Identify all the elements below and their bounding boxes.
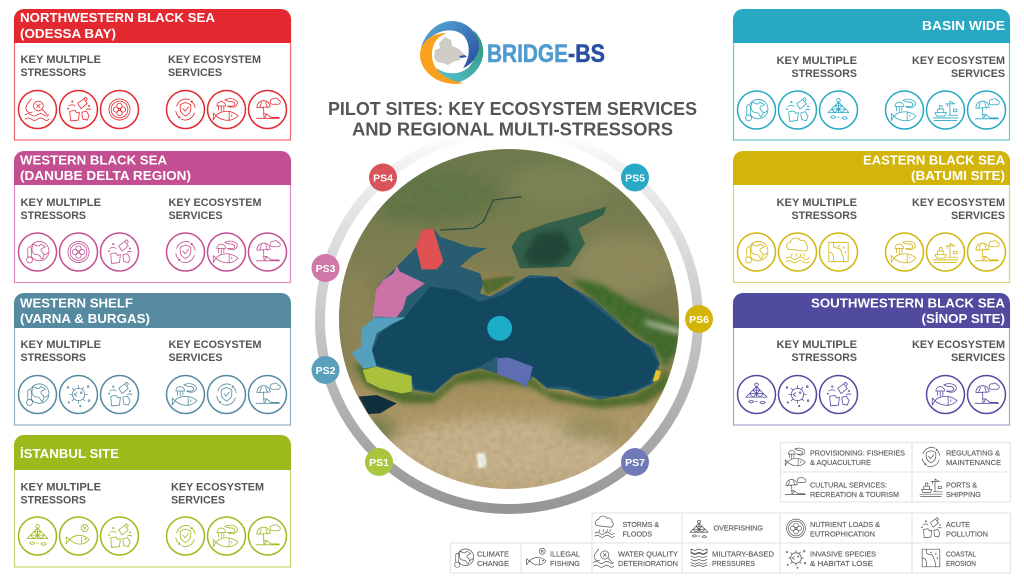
legend item: nutrient loads: EUTROPHICATION <box>810 530 875 538</box>
icon: provisioning <box>886 91 924 129</box>
icon: cultural <box>968 233 1006 271</box>
icon: climate change <box>18 233 56 271</box>
icon: acute pollution <box>820 376 858 414</box>
stressors label: STRESSORS <box>792 68 857 80</box>
icon: provisioning <box>208 517 246 555</box>
title <box>328 98 697 140</box>
services label: SERVICES <box>171 494 225 506</box>
icon: provisioning <box>886 233 924 271</box>
stressors label: KEY MULTIPLE <box>776 339 857 351</box>
legend item: cultural: RECREATION & TOURISM <box>810 490 899 499</box>
stressors label: STRESSORS <box>792 210 857 222</box>
legend item: climate change: CLIMATE <box>477 550 509 558</box>
legend item: water quality <box>594 549 678 568</box>
stressors label: STRESSORS <box>20 67 86 79</box>
icon: acute pollution <box>100 517 138 555</box>
icon: overfishing <box>820 91 858 129</box>
heading: EASTERN BLACK SEA <box>863 152 1006 168</box>
icon: cultural <box>248 376 286 414</box>
title: PILOT SITES: KEY ECOSYSTEM SERVICES <box>328 98 697 119</box>
icon: provisioning <box>208 233 246 271</box>
legend item: regulating: MAINTENANCE <box>946 458 1001 467</box>
services label: KEY ECOSYSTEM <box>171 482 264 494</box>
panel: Northwestern Black Sea <box>14 9 291 140</box>
services label: SERVICES <box>168 67 222 79</box>
panel: Istanbul site <box>14 435 291 567</box>
legend item: ports: PORTS & <box>946 480 977 490</box>
stressors label: STRESSORS <box>20 494 86 506</box>
services label: SERVICES <box>168 210 222 222</box>
icon: illegal fishing <box>60 517 98 555</box>
panel: Southwestern Black Sea <box>733 293 1010 425</box>
ring around map <box>320 131 698 509</box>
heading <box>733 9 1010 43</box>
panel: Basin wide <box>733 9 1010 140</box>
badge PS3: PS3 <box>316 263 336 275</box>
services label: KEY ECOSYSTEM <box>168 54 261 66</box>
heading: WESTERN BLACK SEA <box>20 152 168 168</box>
legend item: water quality: DETERIORATION <box>618 559 678 568</box>
legend item: provisioning: PROVISIONING: FISHERIES <box>810 448 905 458</box>
stressors label: KEY MULTIPLE <box>20 197 101 209</box>
badge PS6 <box>685 305 713 333</box>
icon: provisioning <box>208 90 246 128</box>
legend item: illegal fishing: ILLEGAL <box>550 550 580 558</box>
legend item: regulating: REGULATING & <box>946 448 1000 458</box>
badge PS2 <box>312 356 340 384</box>
icon: cultural <box>968 91 1006 129</box>
legend item: cultural <box>785 477 899 499</box>
stressors label <box>776 339 857 364</box>
icon: climate change <box>738 233 776 271</box>
site PS7 area <box>497 357 533 388</box>
icon: water quality <box>18 90 56 128</box>
services label <box>912 55 1005 80</box>
legend item: military pressures: PRESSURES <box>712 559 755 568</box>
site PS2 area <box>352 317 406 368</box>
icon: storms and floods <box>778 233 816 271</box>
stressors label: KEY MULTIPLE <box>776 197 857 209</box>
stressors label <box>20 54 101 79</box>
legend item: overfishing: OVERFISHING <box>714 524 763 532</box>
badge PS4: PS4 <box>373 172 393 184</box>
stressors label: KEY MULTIPLE <box>20 339 101 351</box>
icon: overfishing <box>738 376 776 414</box>
icon: acute pollution <box>100 233 138 271</box>
icon: provisioning <box>926 376 964 414</box>
icon: regulating <box>166 90 204 128</box>
panel: Western Black Sea <box>14 151 291 282</box>
legend item: cultural: CULTURAL SERVICES: <box>810 480 887 490</box>
heading <box>14 9 291 43</box>
icon: cultural <box>248 517 286 555</box>
heading: NORTHWESTERN BLACK SEA <box>20 10 216 25</box>
badge PS1: PS1 <box>369 457 389 469</box>
title: AND REGIONAL MULTI-STRESSORS <box>352 118 673 140</box>
services label <box>168 54 261 79</box>
icon: coastal erosion <box>820 233 858 271</box>
heading: İSTANBUL SITE <box>20 446 119 461</box>
site PS5 marker <box>487 316 512 341</box>
stressors label <box>20 339 101 364</box>
stressors label: STRESSORS <box>20 352 86 364</box>
stressors label <box>20 197 101 222</box>
services label: SERVICES <box>951 68 1005 80</box>
stressors label: STRESSORS <box>20 210 86 222</box>
icon: ports <box>926 233 964 271</box>
legend item: storms and floods <box>595 516 659 538</box>
services label: SERVICES <box>951 352 1005 364</box>
heading <box>733 293 1010 328</box>
services label: KEY ECOSYSTEM <box>912 55 1005 67</box>
legend item: invasive species: INVASIVE SPECIES <box>810 550 876 558</box>
logo: BRIDGE-BS: BRIDGE <box>487 40 568 68</box>
services label <box>168 339 262 364</box>
stressors label <box>20 482 101 506</box>
stressors label: KEY MULTIPLE <box>20 482 101 494</box>
icon: climate change <box>738 91 776 129</box>
icon: nutrient loads <box>100 90 138 128</box>
legend item: illegal fishing: FISHING <box>550 559 580 568</box>
stressors label <box>776 55 857 80</box>
icon: cultural <box>248 233 286 271</box>
legend item: invasive species <box>786 550 876 568</box>
heading <box>14 435 291 470</box>
heading: WESTERN SHELF <box>20 296 133 310</box>
legend item: coastal erosion: COASTAL <box>946 550 976 558</box>
heading: (BATUMI SITE) <box>911 168 1005 183</box>
site PS1 area <box>363 367 412 393</box>
heading: (ODESSA BAY) <box>20 26 116 41</box>
icon: acute pollution <box>100 376 138 414</box>
panel: Eastern Black Sea <box>733 151 1010 282</box>
legend item: provisioning: & AQUACULTURE <box>810 458 871 467</box>
heading <box>14 151 291 185</box>
legend item: acute pollution: ACUTE <box>946 520 970 529</box>
icon: cultural <box>968 376 1006 414</box>
logo: BRIDGE-BS: -BS <box>568 40 605 68</box>
site PS4 area <box>416 228 443 269</box>
legend item: water quality: WATER QUALITY <box>618 550 678 558</box>
badge PS1 <box>365 448 393 476</box>
legend item: nutrient loads: NUTRIENT LOADS & <box>810 520 880 529</box>
icon: nutrient loads <box>60 233 98 271</box>
badge PS5 <box>621 164 649 192</box>
legend item: military pressures <box>691 549 775 568</box>
icon: acute pollution <box>778 91 816 129</box>
icon: regulating <box>208 376 246 414</box>
badge PS4 <box>369 164 397 192</box>
badge PS5: PS5 <box>625 172 645 184</box>
services label: KEY ECOSYSTEM <box>912 339 1005 351</box>
services label: SERVICES <box>168 352 222 364</box>
sea: shelf and deep water, in zoom units <box>352 197 660 414</box>
legend item: regulating <box>922 447 1001 467</box>
services label: KEY ECOSYSTEM <box>912 197 1005 209</box>
icon: provisioning <box>166 376 204 414</box>
icon: invasive species <box>778 376 816 414</box>
legend item: illegal fishing <box>526 548 580 568</box>
heading: BASIN WIDE <box>922 18 1005 33</box>
legend item: coastal erosion: EROSION <box>946 559 976 568</box>
legend item: climate change: CHANGE <box>477 559 509 568</box>
heading: SOUTHWESTERN BLACK SEA <box>811 296 1006 310</box>
icon: invasive species <box>60 376 98 414</box>
stressors label: KEY MULTIPLE <box>776 55 857 67</box>
legend item: overfishing <box>690 520 763 538</box>
legend item: provisioning <box>785 448 905 467</box>
heading: (VARNA & BURGAS) <box>20 311 150 326</box>
legend: ecosystem services <box>780 442 1010 502</box>
stressors label: STRESSORS <box>792 352 857 364</box>
legend item: storms and floods: STORMS & <box>622 520 659 529</box>
badge PS3 <box>312 254 340 282</box>
legend item: military pressures: MILITARY-BASED <box>712 550 775 558</box>
heading <box>733 151 1010 185</box>
legend item: storms and floods: FLOODS <box>622 530 652 538</box>
legend item: nutrient loads <box>787 519 880 538</box>
icon: cultural <box>248 90 286 128</box>
heading: (SİNOP SITE) <box>922 311 1005 326</box>
badge PS7 <box>621 448 649 476</box>
icon: climate change <box>18 376 56 414</box>
services label: KEY ECOSYSTEM <box>168 197 262 209</box>
services label: SERVICES <box>951 210 1005 222</box>
legend item: invasive species: & HABITAT LOSE <box>810 559 873 568</box>
services label <box>912 339 1005 364</box>
services label <box>912 197 1005 222</box>
panel: Western Shelf <box>14 293 291 425</box>
stressors label: KEY MULTIPLE <box>20 54 101 66</box>
heading: (DANUBE DELTA REGION) <box>20 168 191 183</box>
legend: stressors <box>450 513 1010 573</box>
legend item: ports: SHIPPING <box>946 490 981 499</box>
site PS3 area <box>373 266 425 317</box>
icon: overfishing <box>18 517 56 555</box>
icon: regulating <box>166 233 204 271</box>
services label <box>168 197 262 222</box>
legend item: coastal erosion <box>922 549 976 568</box>
icon: regulating <box>166 517 204 555</box>
badge PS6: PS6 <box>689 314 709 326</box>
legend item: acute pollution: POLLUTION <box>946 530 988 538</box>
legend item: ports <box>920 479 981 499</box>
services label: KEY ECOSYSTEM <box>168 339 262 351</box>
services label <box>171 482 264 506</box>
legend item: climate change <box>455 549 509 568</box>
stressors label <box>776 197 857 222</box>
icon: acute pollution <box>60 90 98 128</box>
badge PS7: PS7 <box>625 457 645 469</box>
logo: BRIDGE-BS <box>420 21 605 84</box>
satellite map of the Black Sea <box>335 149 680 489</box>
icon: ports <box>926 91 964 129</box>
badge PS2: PS2 <box>316 365 336 377</box>
site PS6 area <box>653 370 661 382</box>
heading <box>14 293 291 328</box>
legend item: acute pollution <box>922 518 988 538</box>
